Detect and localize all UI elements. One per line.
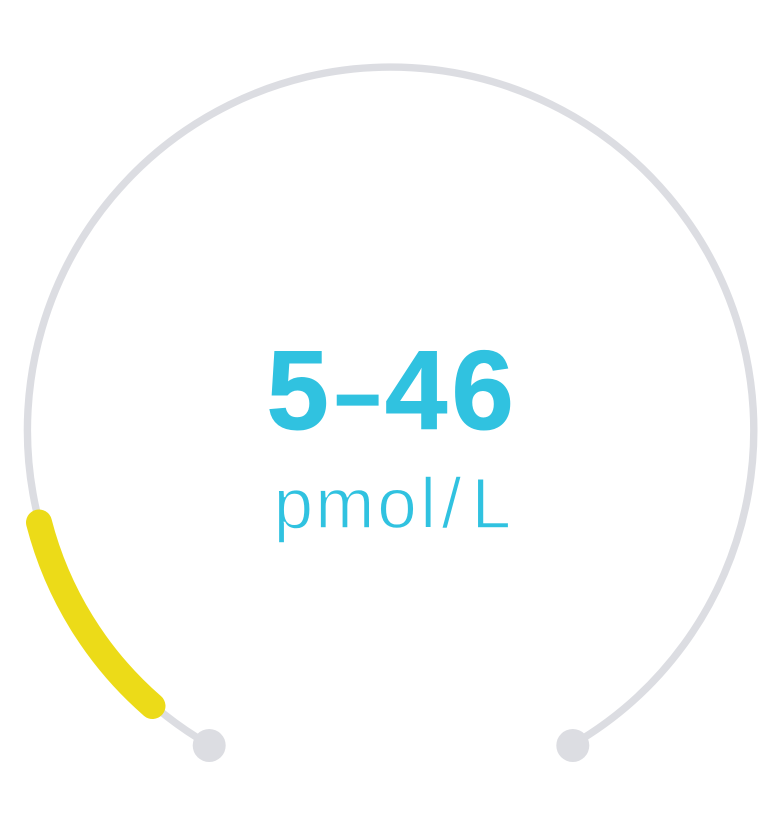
value: 5–46: 4	[385, 328, 447, 453]
unit: pmol/L: pmol/L	[274, 465, 511, 544]
gauge track arc	[27, 67, 754, 745]
value: 5–46: 6	[452, 328, 514, 453]
left end dot	[193, 729, 226, 762]
yellow range indicator arc	[39, 522, 152, 706]
right end dot	[556, 729, 589, 762]
value: 5–46: –	[336, 350, 379, 438]
value: 5–46: 5	[266, 328, 329, 453]
